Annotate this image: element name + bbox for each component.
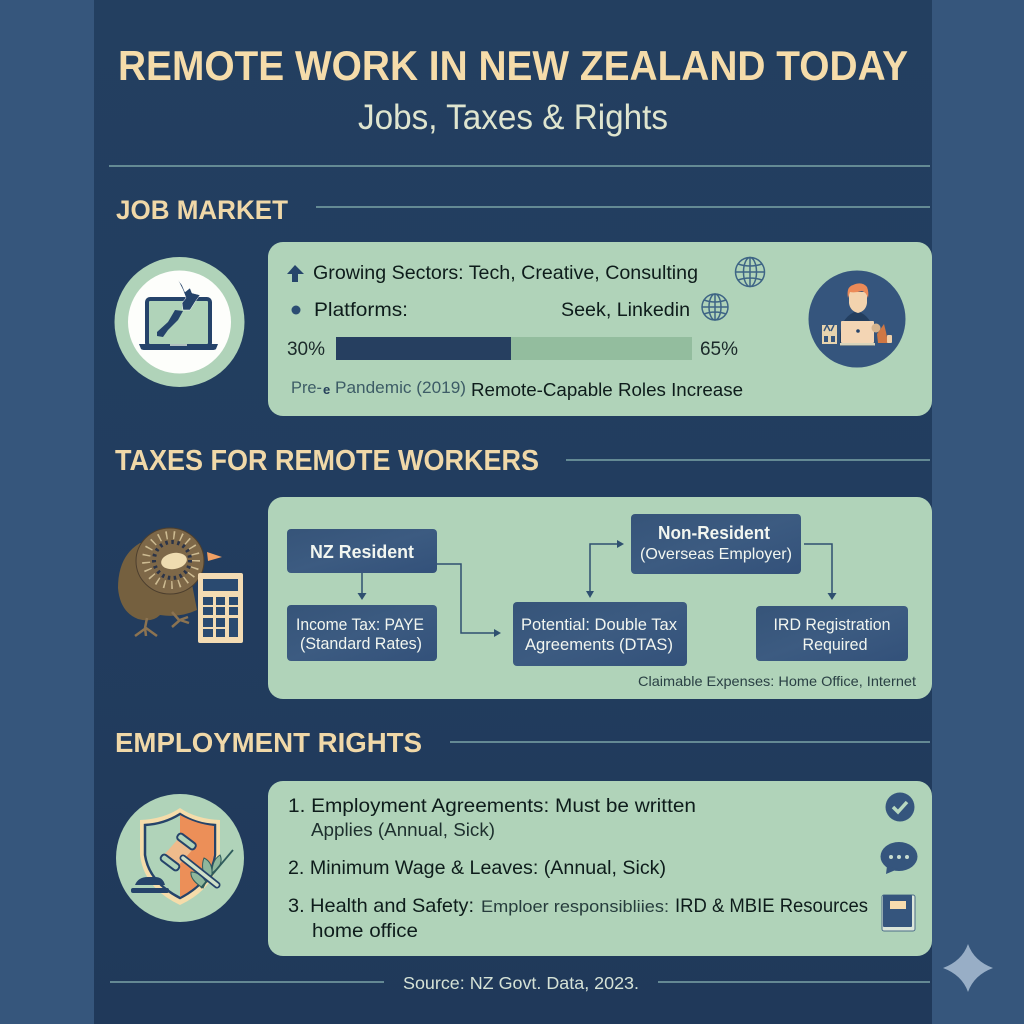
text: platforms: Platforms: (314, 299, 408, 321)
text: item 3: home office (312, 920, 418, 942)
icon: globe 2 (702, 294, 728, 320)
panel: employment rights (268, 781, 932, 956)
panel: job market (268, 242, 932, 416)
panel: taxes (268, 497, 932, 699)
arrow: resident to income tax (358, 573, 366, 600)
box: IRD registration: IRD Registration (774, 616, 890, 634)
icon: laptop with New Zealand map (114, 257, 244, 387)
bar chart (336, 337, 692, 360)
icon: up arrow (287, 265, 304, 282)
text: item 2: 2. Minimum Wage & Leaves: (Annual, Sick) (288, 857, 666, 879)
box: income tax (287, 605, 437, 661)
text: growing sectors: Growing Sectors: Tech, Creative, Consulting (313, 262, 698, 284)
text: 65 percent: 65% (700, 338, 738, 360)
text: item 1: Applies (Annual, Sick) (311, 820, 495, 840)
icon: sparkle (943, 944, 993, 992)
arrow: non-resident to IRD (804, 544, 836, 600)
box: income tax: (Standard Rates) (300, 635, 422, 653)
text: 30 percent: 30% (287, 338, 325, 360)
icon: book (882, 895, 915, 931)
text: pre-pandemic label: Pandemic (2019) (335, 378, 466, 397)
box: NZ resident: NZ Resident (310, 542, 414, 562)
icon: speech bubble (880, 842, 918, 874)
text: item 1 (288, 795, 696, 840)
icon: globe 1 (736, 258, 764, 286)
box: income tax: Income Tax: PAYE (296, 616, 424, 634)
box: NZ resident (287, 529, 437, 573)
box: double tax agreements: Agreements (DTAS) (525, 636, 673, 654)
title: REMOTE WORK IN NEW ZEALAND TODAY (118, 42, 908, 89)
arrow: resident to double tax (437, 564, 501, 637)
icon: shield with gavel and leaf (116, 794, 244, 922)
text: item 3: Emploer responsibliies: (481, 898, 669, 916)
text: claimable expenses: Claimable Expenses: Home Office, Internet (638, 673, 916, 689)
icon: kiwi with calculator (118, 528, 243, 643)
box: double tax agreements (513, 602, 687, 666)
box: non-resident (631, 514, 801, 574)
box: non-resident: (Overseas Employer) (640, 546, 792, 563)
text: remote-capable roles: Remote-Capable Roles Increase (471, 379, 743, 400)
heading: employment rights: EMPLOYMENT RIGHTS (115, 727, 422, 758)
box: non-resident: Non-Resident (658, 523, 770, 543)
icon: check badge (886, 792, 914, 822)
text: pre-pandemic label: e (323, 382, 330, 397)
icon: remote worker (808, 270, 906, 368)
text: platform names: Seek, Linkedin (561, 299, 690, 321)
text: item 3: 3. Health and Safety: (288, 895, 474, 917)
text: item 1: 1. Employment Agreements: Must be written (288, 795, 696, 817)
box: IRD registration: Required (802, 636, 868, 654)
arrow: double tax to non-resident (586, 540, 624, 598)
icon: bullet (292, 306, 300, 314)
text: pre-pandemic label: Pre- (291, 378, 322, 397)
box: IRD registration (756, 606, 908, 661)
footer: source: Source: NZ Govt. Data, 2023. (403, 973, 639, 993)
heading: job market: JOB MARKET (116, 195, 288, 225)
text: item 3: IRD & MBIE Resources (675, 895, 868, 917)
box: double tax agreements: Potential: Double Tax (521, 616, 678, 634)
text: item 3 (288, 895, 868, 942)
subtitle: Jobs, Taxes & Rights (358, 98, 668, 137)
heading: taxes: TAXES FOR REMOTE WORKERS (115, 445, 539, 477)
